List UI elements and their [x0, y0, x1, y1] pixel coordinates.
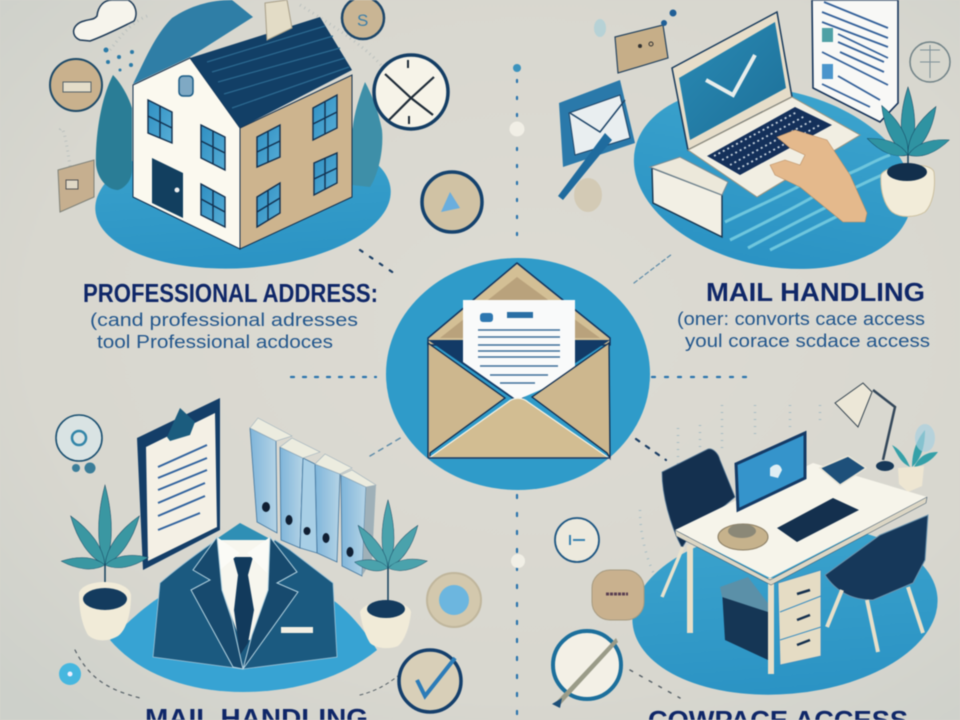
bottom flap: [429, 398, 609, 458]
desk ripples: [725, 155, 895, 250]
left lapel: [191, 537, 243, 669]
dot nodes: [510, 64, 525, 568]
platform: [110, 572, 377, 692]
pot: [881, 165, 935, 216]
platform: [625, 513, 945, 707]
left pot: [79, 582, 131, 640]
desk mouse pad: [718, 524, 768, 550]
icon: tan tag: [615, 25, 668, 73]
right chair legs: [827, 587, 923, 652]
roof: [190, 17, 352, 128]
icon: tan round tag: [592, 570, 644, 620]
platform: [617, 63, 929, 293]
icon: shield badge: [910, 42, 950, 82]
icon: coin: S: [357, 11, 368, 30]
envelope side flaps: [428, 343, 505, 458]
heading: professional address: PROFESSIONAL ADDRESS:: [83, 278, 378, 308]
icon: clock: [374, 55, 448, 129]
right plant: [353, 500, 428, 573]
blue circle: [386, 258, 650, 490]
monitor: [736, 433, 805, 510]
left plant: [61, 485, 149, 571]
panel: business suit and files: [61, 398, 428, 692]
suit jacket: [153, 540, 337, 669]
pocket square: [281, 627, 313, 633]
text: mail handling line 1: (oner: convorts cace access: [677, 308, 925, 329]
house emblem: [179, 76, 193, 96]
text: mail handling line 2: youl corace scdace access: [685, 330, 930, 351]
icon: target badge: [56, 415, 102, 474]
windows: [148, 95, 337, 227]
letter icon: [480, 313, 493, 322]
icon: tan badge left: [50, 59, 102, 111]
text: professional address line 1: (cand professional adresses: [90, 309, 358, 330]
desk plant: [892, 430, 938, 467]
book: [820, 456, 866, 485]
house tan wall: [240, 75, 352, 249]
letter bar: [507, 312, 533, 318]
shirt: [217, 540, 270, 640]
chimney: [265, 0, 292, 40]
left chair leg: [662, 547, 683, 597]
icon: check badge: [399, 650, 461, 712]
left plant stem: [104, 540, 106, 600]
clipboard: [137, 398, 220, 570]
icon: tan note: [58, 160, 94, 212]
right chair: [825, 515, 928, 600]
binders: [250, 428, 366, 576]
stipple: [60, 5, 385, 200]
shirt collar: [217, 537, 270, 573]
open flap: [428, 263, 610, 345]
icon: small teal dot: [59, 663, 81, 685]
panel: professional address house: [60, 0, 395, 278]
panel: mail handling laptop: [617, 0, 951, 293]
text: professional address line 2: tool Professional acdoces: [97, 331, 333, 352]
laptop: [672, 12, 792, 150]
keyboard: [707, 107, 832, 175]
right lapel: [243, 537, 298, 669]
right pot: [360, 602, 411, 648]
storage stool: [722, 590, 768, 660]
house white wall: [133, 58, 240, 249]
desk top: [675, 463, 927, 578]
icon: cloud: [74, 0, 136, 72]
document: [812, 0, 898, 122]
tree right: [352, 82, 382, 187]
plant: [865, 87, 951, 161]
panel: central envelope: [386, 258, 650, 490]
icon: small dots: [594, 10, 676, 37]
icon: coin: [342, 0, 384, 39]
panel: coworking desk: [625, 383, 945, 707]
icon: globe badge: [427, 573, 481, 627]
stipple: [640, 405, 820, 585]
lamp: [835, 383, 872, 427]
tie: [233, 557, 254, 655]
letter: [463, 300, 575, 400]
envelope interior: [428, 340, 610, 402]
desk keyboard: [777, 498, 859, 542]
left chair: [662, 449, 735, 548]
icon: clock with pen: [552, 631, 621, 708]
heading: mail handling right: MAIL HANDLING: [706, 277, 925, 307]
connector lines: [75, 80, 750, 720]
platform: [91, 122, 395, 278]
back hill: [133, 0, 253, 84]
door: [152, 158, 183, 218]
box: [652, 168, 722, 237]
icon: envelope tag with pen: [558, 80, 635, 212]
icon: white badge: [555, 518, 599, 562]
drawers: [778, 570, 821, 665]
desk legs: [690, 545, 771, 674]
right plant stem: [387, 540, 389, 610]
hand: [770, 130, 867, 222]
collar back: [215, 523, 272, 570]
icon: navigation badge: [422, 172, 482, 232]
tree left: [96, 75, 132, 190]
plant stem: [907, 140, 909, 170]
